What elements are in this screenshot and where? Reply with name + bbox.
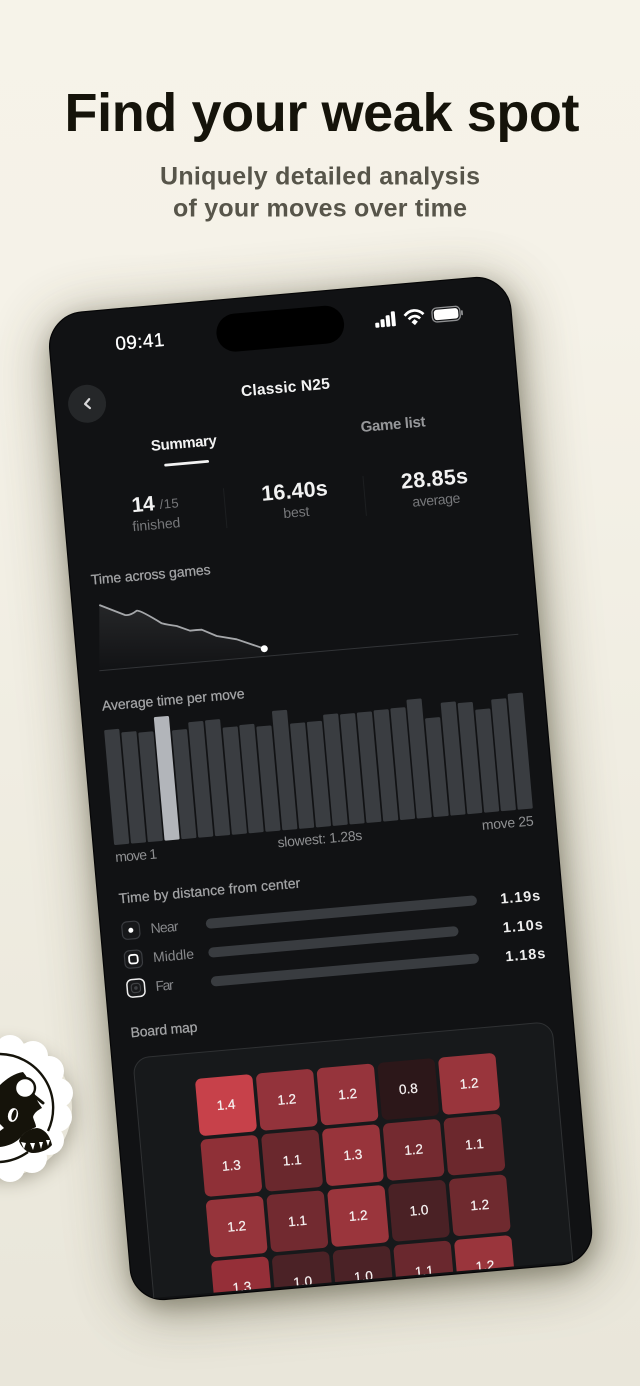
bar chart: average time per move	[103, 685, 533, 845]
cell row 1: 0.8	[398, 1081, 418, 1097]
cell row 1	[195, 1053, 500, 1136]
cell row 1: 1.2	[277, 1091, 297, 1108]
icon: battery	[432, 306, 463, 322]
stat: average: average	[412, 490, 461, 510]
icon: wifi	[404, 310, 424, 326]
cell row 3: 1.0	[409, 1202, 429, 1219]
badge shadow	[0, 1040, 72, 1176]
icon: near	[121, 921, 140, 940]
row: middle: 1.10s	[502, 917, 543, 937]
clock: 09:41	[115, 330, 165, 355]
cell row 4: 1.1	[414, 1263, 434, 1280]
row: near	[121, 886, 541, 941]
phone	[47, 275, 599, 1359]
axis label: move 25: move 25	[481, 812, 535, 833]
cell row 2: 1.3	[221, 1157, 241, 1174]
axis label: slowest: slowest: 1.28s	[277, 827, 363, 850]
cell row 1: 1.2	[459, 1075, 479, 1092]
row: middle: Middle	[152, 946, 195, 965]
heading: time across games: Time across games	[90, 561, 211, 588]
tab: summary: Summary	[150, 432, 218, 455]
cell row 2: 1.1	[464, 1136, 484, 1153]
cell row 2: 1.2	[404, 1141, 424, 1158]
sticker badge	[0, 1035, 73, 1182]
stat: best: 16.40s	[260, 476, 329, 506]
heading: time by distance: Time by distance from center	[118, 875, 301, 906]
row: far: Far	[155, 976, 175, 994]
status bar	[114, 294, 465, 362]
row: near: 1.19s	[500, 888, 541, 908]
axis label: move 1: move 1	[115, 845, 158, 865]
icon: far	[126, 979, 145, 998]
cell row 1: 1.2	[338, 1086, 358, 1103]
highlighted bar: slowest move	[154, 716, 180, 841]
icon: middle	[124, 950, 143, 969]
row: far: 1.18s	[505, 946, 546, 965]
cell row 2	[200, 1113, 506, 1197]
cell row 3: 1.2	[348, 1207, 368, 1224]
stat: finished: finished	[132, 514, 181, 534]
cell row 4: 1.0	[293, 1274, 313, 1290]
cell row 3	[205, 1174, 511, 1258]
tab: summary	[150, 432, 219, 468]
stat: finished	[130, 490, 181, 534]
cell row 2: 1.1	[282, 1152, 302, 1169]
cell row 4: 1.3	[232, 1279, 252, 1295]
tab: game list: Game list	[360, 413, 426, 436]
subtitle: Uniquely detailed analysis	[160, 162, 480, 190]
stat: finished: 14	[131, 492, 156, 517]
cell row 3: 1.2	[470, 1197, 490, 1213]
phone body	[47, 275, 594, 1302]
screen heading: Classic N25	[240, 376, 331, 400]
cell row 4: 1.2	[475, 1258, 495, 1274]
subtitle	[160, 162, 480, 222]
cell row 4: 1.0	[354, 1268, 374, 1285]
stat: best	[260, 476, 330, 523]
title: Find your weak spot	[64, 83, 580, 143]
line chart: time across games	[99, 605, 518, 671]
cell row 2: 1.3	[343, 1147, 363, 1163]
stat: average: 28.85s	[400, 464, 469, 494]
phone shadow	[46, 275, 594, 1302]
row: far	[126, 943, 546, 999]
stat: best: best	[283, 503, 310, 521]
cell row 1: 1.4	[216, 1097, 237, 1113]
heading: board map: Board map	[130, 1019, 198, 1040]
cell row 3: 1.2	[227, 1218, 247, 1235]
dynamic island	[215, 304, 346, 353]
icon: signal	[374, 311, 396, 328]
stat: average	[400, 464, 470, 511]
row: middle	[124, 915, 543, 970]
row: near: Near	[150, 918, 179, 936]
subtitle: of your moves over time	[173, 194, 467, 222]
cell row 4	[211, 1236, 514, 1293]
average time per move heading: Average time per move	[101, 685, 245, 714]
back button	[66, 383, 108, 424]
stat: finished: /15	[159, 495, 179, 512]
panel: board map	[134, 1022, 574, 1298]
cell row 3: 1.1	[287, 1213, 307, 1229]
